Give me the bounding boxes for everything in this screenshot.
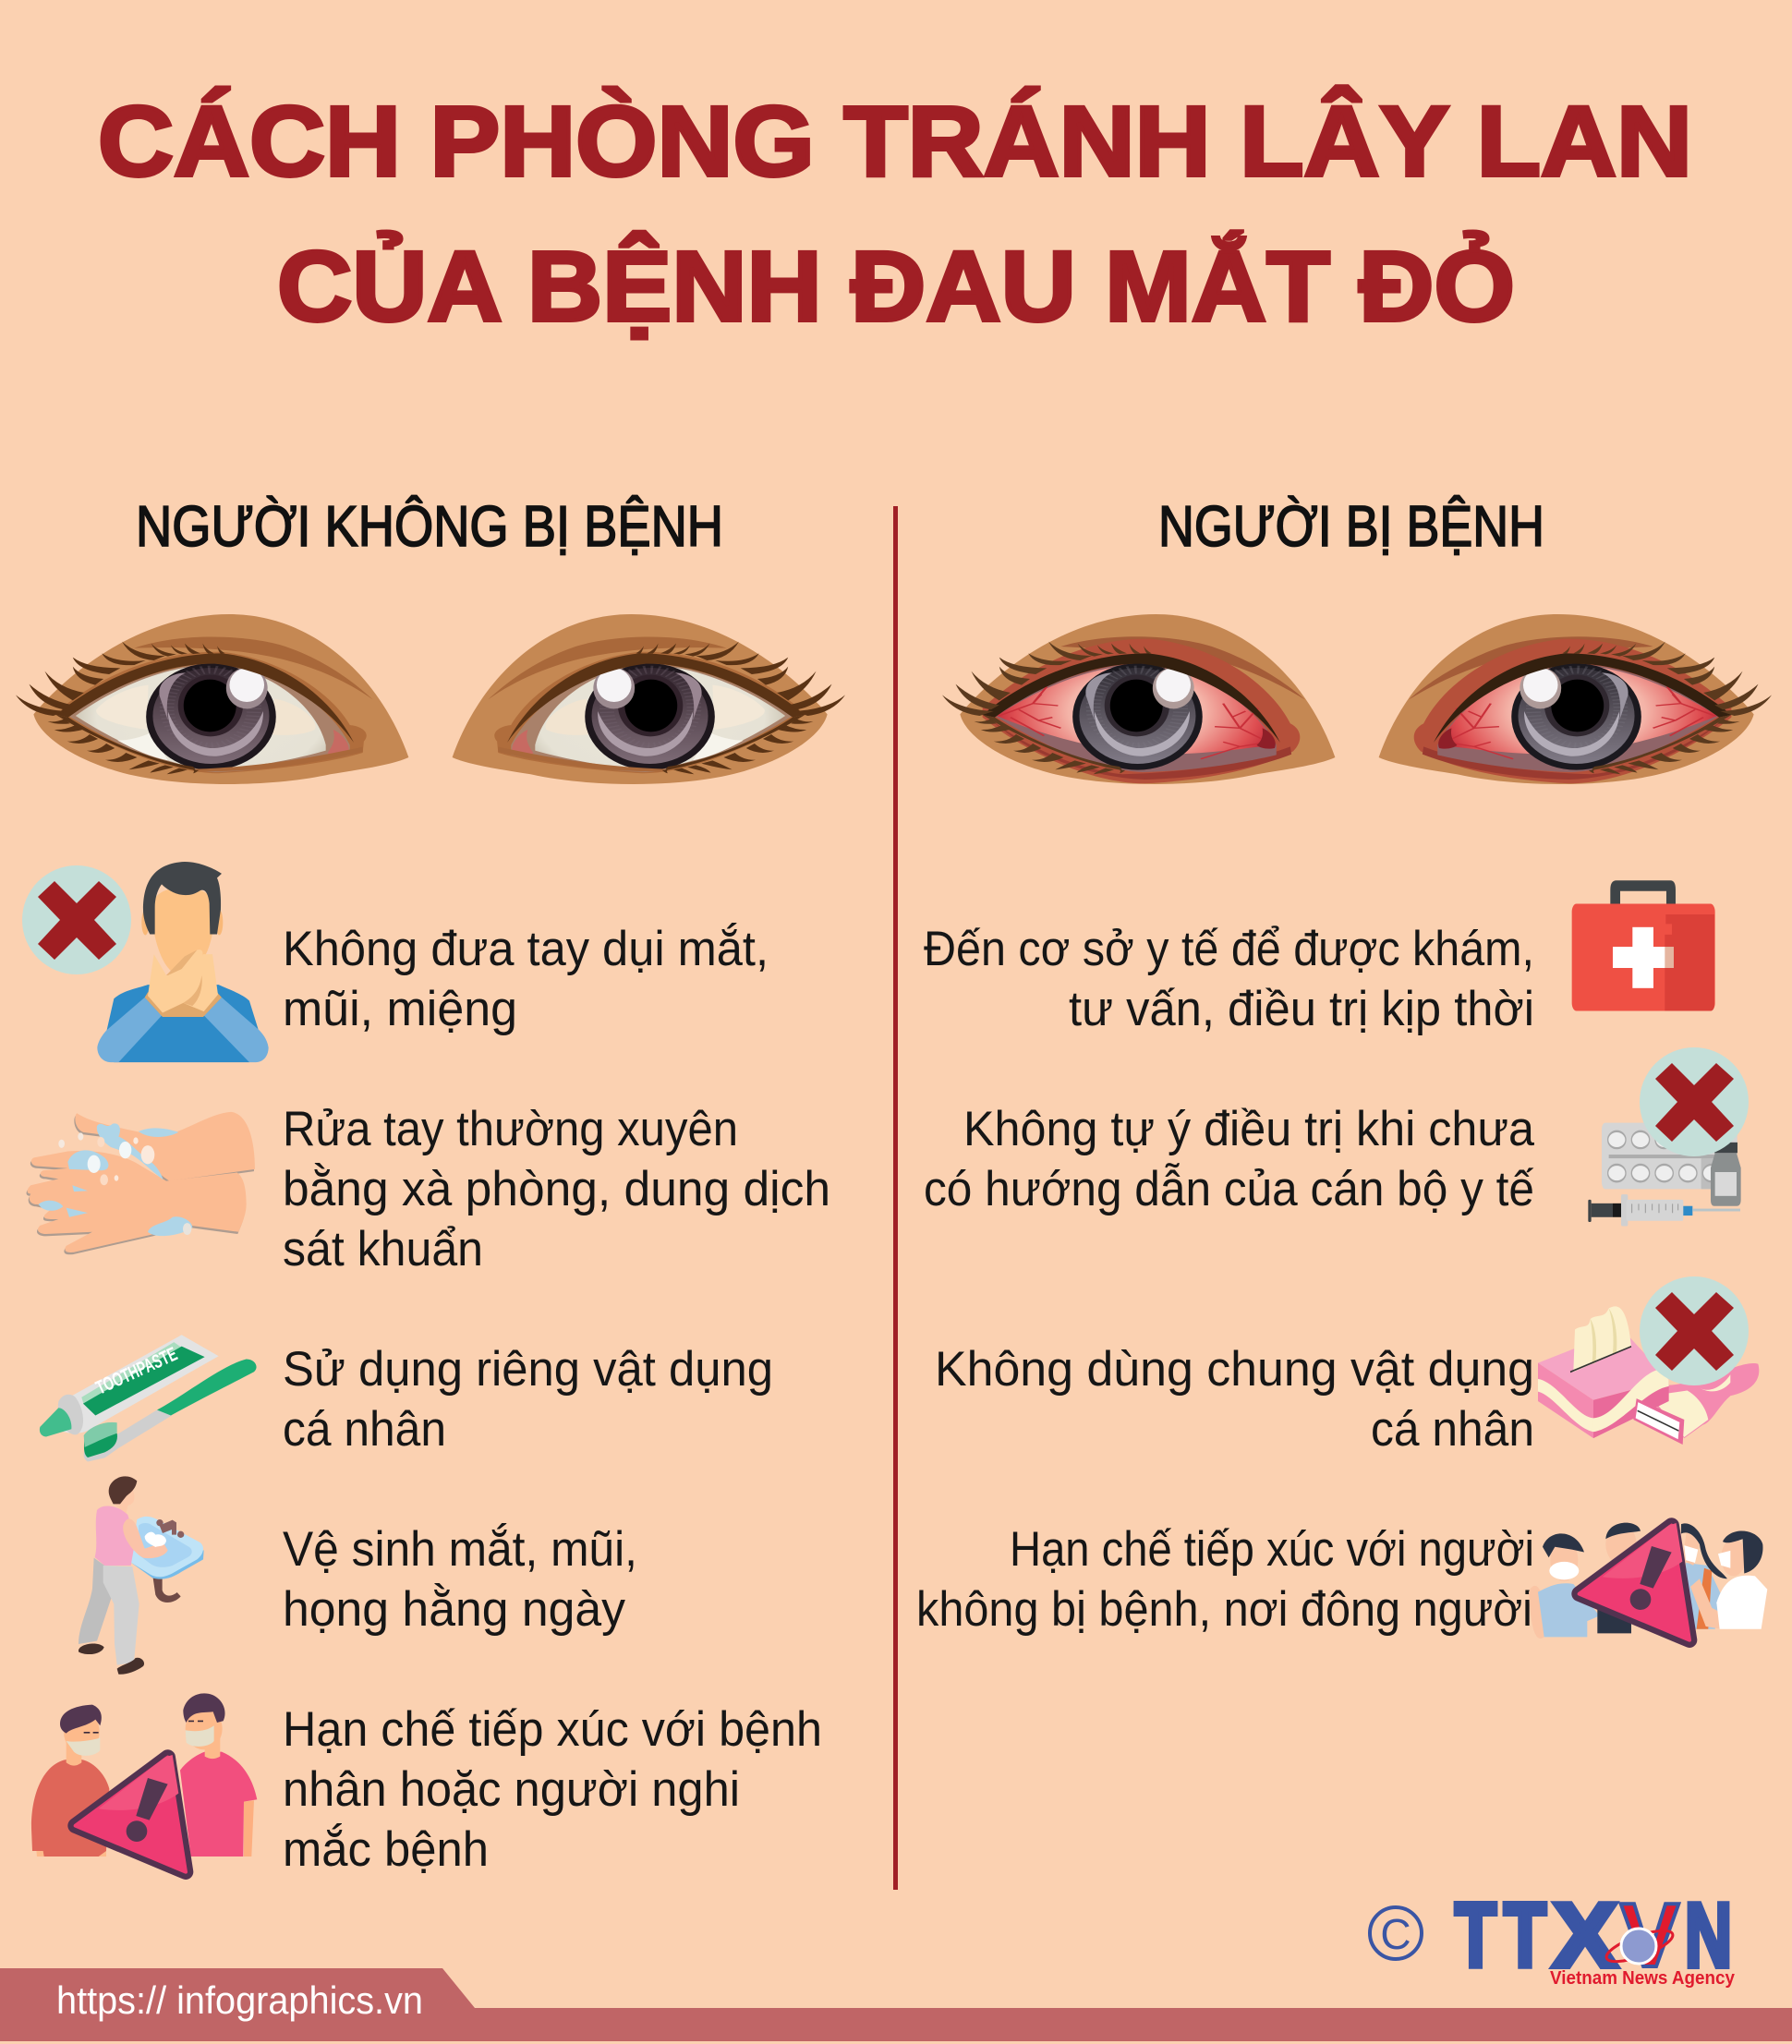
icon: man covering face with x: [22, 862, 269, 1062]
healthy eyes illustration: [16, 614, 845, 784]
text: limit contact patients: [283, 1702, 822, 1877]
text: wash hands: Rửa tay thường xuyên: [283, 1102, 738, 1156]
center divider: [893, 506, 898, 1890]
icon: tissue box and razor with x: [1538, 1276, 1759, 1445]
text: wash hands: sát khuẩn: [283, 1222, 483, 1276]
text: personal items: [283, 1342, 773, 1457]
item: personal items: [40, 1335, 773, 1462]
icon: first aid kit: [1572, 880, 1715, 1010]
text: clean eyes: [283, 1522, 637, 1637]
logo: TTXVN: [1370, 1884, 1736, 1989]
text: do not share: [935, 1342, 1534, 1457]
text: limit contact healthy: Hạn chế tiếp xúc với người: [1010, 1522, 1534, 1577]
text: no self treatment: [924, 1102, 1534, 1216]
text: do not share: Không dùng chung vật dụng: [935, 1342, 1534, 1397]
text: go to clinic: Đến cơ sở y tế để được khám,: [924, 922, 1534, 976]
panel: sick people: [916, 495, 1772, 1640]
text: wash hands: bằng xà phòng, dung dịch: [283, 1162, 830, 1216]
item: clean eyes nose throat: [79, 1476, 637, 1675]
text: clean eyes: họng hằng ngày: [283, 1582, 625, 1637]
item: go to clinic: [924, 880, 1715, 1036]
copyright mark: C: [1380, 1910, 1411, 1958]
text: go to clinic: tư vấn, điều trị kịp thời: [1069, 982, 1534, 1036]
text: personal items: cá nhân: [283, 1402, 446, 1457]
website url: https:// infographics.vn: [56, 1978, 423, 2022]
item: do not share items: [935, 1276, 1759, 1457]
wordmark: T: [1504, 1884, 1546, 1986]
icon: person at sink: [79, 1476, 204, 1675]
text: personal items: Sử dụng riêng vật dụng: [283, 1342, 773, 1397]
text: no self treatment: Không tự ý điều trị khi chưa: [963, 1102, 1534, 1156]
footer bar: [0, 1968, 1792, 2041]
panel: healthy people: [16, 495, 845, 1877]
wordmark: X: [1553, 1884, 1617, 1986]
item: do not touch face: [22, 862, 769, 1062]
item: limit contact with healthy people: [916, 1522, 1767, 1640]
copyright mark: [1370, 1907, 1422, 1959]
title: CỦA BỆNH ĐAU MẮT ĐỎ: [277, 230, 1515, 342]
text: do not touch: mũi, miệng: [283, 982, 517, 1036]
heading: healthy: NGƯỜI KHÔNG BỊ BỆNH: [136, 495, 723, 559]
text: do not share: cá nhân: [1371, 1402, 1534, 1457]
item: no self treatment: [924, 1047, 1749, 1227]
text: limit contact healthy: [916, 1522, 1534, 1637]
icon: masked men with warning: [31, 1693, 257, 1872]
text: clean eyes: Vệ sinh mắt, mũi,: [283, 1522, 637, 1577]
wordmark: N: [1685, 1884, 1732, 1986]
title: CÁCH PHÒNG TRÁNH LÂY LAN: [98, 85, 1692, 197]
text: wash hands: [283, 1102, 830, 1276]
icon: toothpaste and toothbrush: [40, 1335, 257, 1462]
text: limit contact healthy: không bị bệnh, nơi đông người: [916, 1582, 1532, 1637]
globe: [1604, 1925, 1676, 1967]
heading: sick: NGƯỜI BỊ BỆNH: [1158, 495, 1544, 559]
text: limit contact patients: Hạn chế tiếp xúc với bệnh: [283, 1702, 822, 1757]
icon: medicine with x: [1588, 1047, 1749, 1227]
text: do not touch: Không đưa tay dụi mắt,: [283, 922, 769, 976]
tagline: Vietnam News Agency: [1550, 1968, 1736, 1989]
text: limit contact patients: nhân hoặc người nghi: [283, 1762, 740, 1817]
icon: crowd with warning: [1529, 1523, 1767, 1640]
item: wash hands: [27, 1102, 830, 1276]
wordmark: T: [1455, 1884, 1496, 1986]
icon: washing hands: [27, 1112, 255, 1254]
wordmark: [1455, 1884, 1732, 1986]
text: limit contact patients: mắc bệnh: [283, 1822, 489, 1877]
icon: toothpaste and toothbrush: TOOTHPASTE: [93, 1344, 181, 1399]
title: [98, 85, 1692, 342]
red eyes illustration: [942, 614, 1772, 784]
text: go to clinic: [924, 922, 1534, 1036]
item: limit contact with patients: [31, 1693, 822, 1877]
text: no self treatment: có hướng dẫn của cán bộ y tế: [924, 1162, 1534, 1216]
wordmark: V: [1620, 1884, 1679, 1986]
text: do not touch: [283, 922, 769, 1036]
